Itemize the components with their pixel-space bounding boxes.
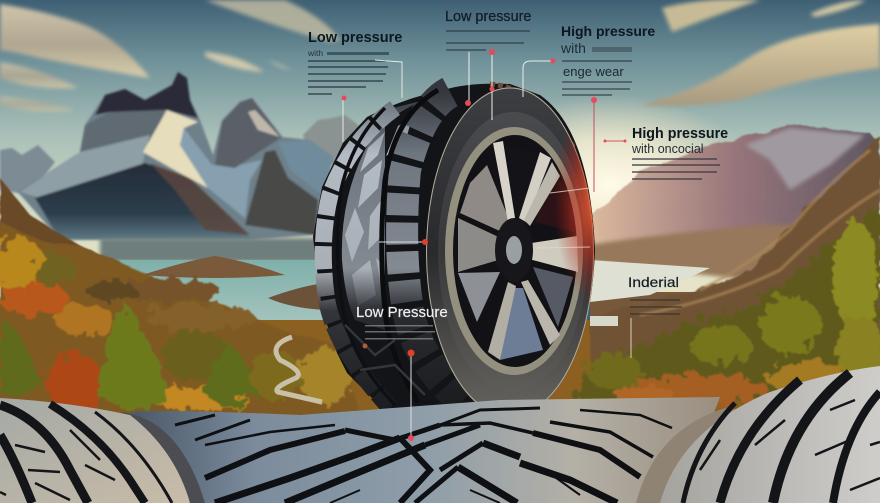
bottom tires [0,366,880,503]
brown ridge [150,163,250,235]
right foliage [575,205,880,406]
sub-heading: with oncocial [631,142,704,156]
window lower left [458,272,500,322]
base silhouette [18,72,333,240]
tread body [313,84,595,418]
winding road [276,337,322,402]
window upper center [505,145,545,215]
marker [550,58,556,64]
snow valley [180,128,262,218]
left tire [0,398,190,503]
lower tread lines [345,325,425,395]
marker lower [408,435,414,441]
clouds [0,0,880,112]
sub-heading: with [560,40,586,56]
connector to wheel [537,188,590,248]
callout: inderial [628,274,682,358]
rim well [453,135,577,367]
description lines [365,325,435,340]
upper face [80,110,165,152]
hub bolts ring [495,218,533,282]
main mountain massif [18,72,333,240]
wear text: enge wear [563,64,624,79]
heading: High pressure [561,23,655,39]
marker small [362,344,368,348]
heading: Low Pressure [356,304,448,321]
dark peak cap [95,72,198,118]
left tire shoulder [122,412,205,503]
cream lit face [143,110,208,188]
sidewall edge line [426,88,594,416]
right mid hill [590,225,820,280]
trees left [0,302,258,412]
markers [465,49,495,106]
right peak [215,98,282,168]
description lines [562,60,632,96]
window upper left [460,165,510,232]
callout: low pressure top center [445,9,531,120]
far shore haze [100,238,330,262]
sub-heading blurred [592,47,632,52]
heading: High pressure [632,126,728,142]
autumn foliage [0,237,353,413]
main tire [313,78,595,409]
center tire base [130,397,720,503]
outer groove [337,108,395,405]
description lines [446,30,530,51]
right mountains [590,125,880,250]
right ground base [590,292,880,352]
heading: Low pressure [445,9,531,25]
callout: high pressure top right [523,23,655,192]
description lines [308,52,389,95]
headland [268,284,325,310]
ground base [0,320,880,420]
heading: Low pressure [308,30,402,46]
hillside ridge highlights [640,150,880,315]
small lake right [590,316,618,326]
description lines [632,158,720,180]
window upper right [535,170,574,232]
right hillside [590,135,880,400]
zigzag center band [342,100,425,330]
right tire grooves [683,373,880,503]
right lake [590,260,710,302]
main groove [382,90,438,402]
heading: Inderial [628,274,679,290]
snow slope [20,135,150,198]
connector down [410,354,412,438]
right tire [660,366,880,503]
callout: high pressure right [537,126,728,248]
window lower right [533,267,573,327]
marker lower [591,97,597,103]
rim lip [445,127,583,375]
left tire grooves [0,404,172,503]
sidewall [426,87,594,417]
connector [523,61,552,97]
callout: low pressure top left [307,30,402,142]
outer lugs [323,108,395,408]
sun glow [460,95,760,275]
connector lines [469,52,492,120]
right tire shoulder [636,408,740,503]
left dark hill [0,178,120,300]
left foreground hills [0,222,360,420]
sky background [0,0,880,300]
with word: with [307,48,323,58]
red sun glow on tire [556,132,594,298]
lake left [100,260,340,330]
marker tread [422,239,428,245]
spokes [458,141,578,360]
tread diamonds [345,118,412,306]
window lower center [500,288,543,360]
callout: low pressure on tread [356,239,448,441]
description lines [630,299,682,315]
right mountain snow [745,128,865,190]
markers [604,140,626,142]
right peak highlight [248,110,280,137]
island [142,256,285,278]
cone peak [245,150,318,235]
sidewall inner band [438,112,588,392]
hub cap [506,236,522,264]
marker [342,96,346,100]
connector [630,318,632,358]
far left mountains [0,145,55,195]
far center mountains [303,115,365,170]
connector with markers [605,140,625,142]
marker upper [408,350,414,356]
center tire grooves [175,408,672,503]
vertical marker line [593,100,595,192]
inner lugs [402,92,470,408]
connector line [343,60,402,142]
right slate slope [278,140,333,195]
top tread edge [490,84,575,150]
dark lower face [35,163,250,240]
connector tread [379,241,425,243]
